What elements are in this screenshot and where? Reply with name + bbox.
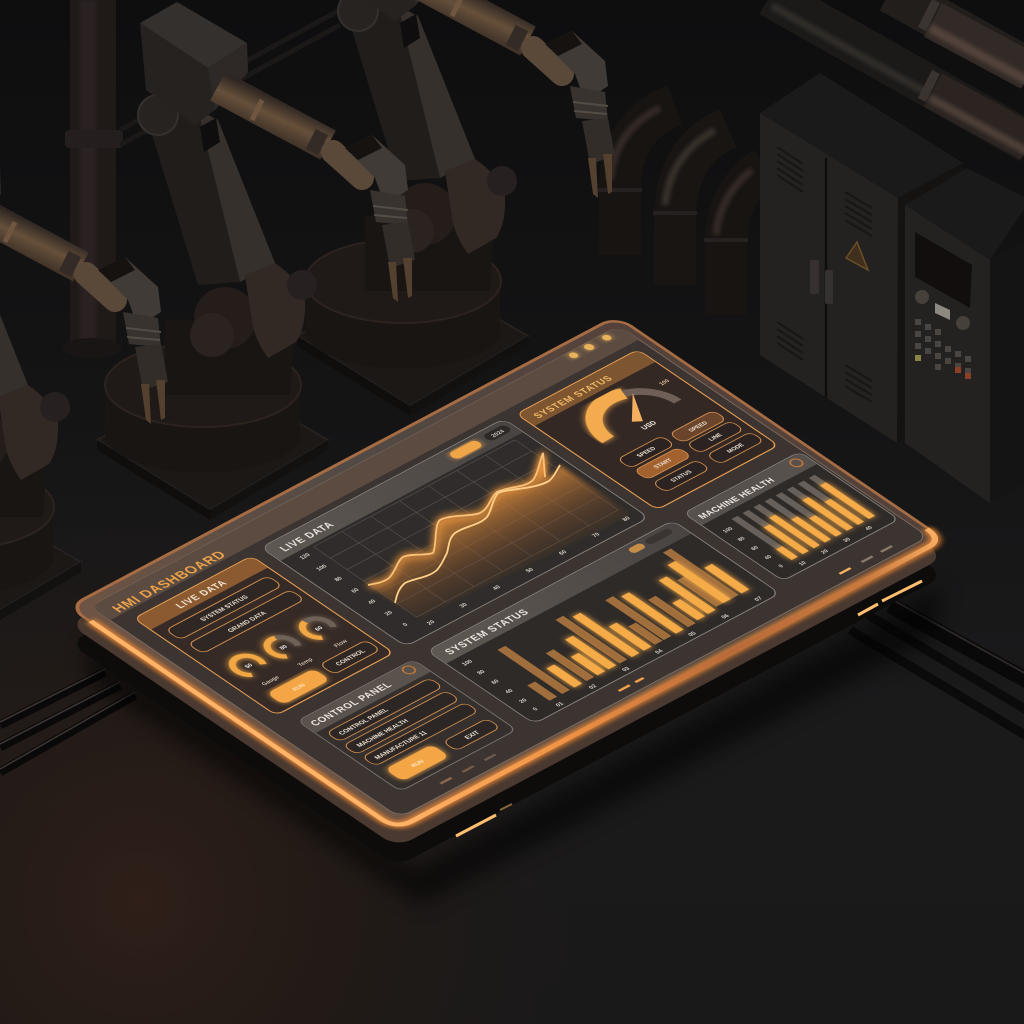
panel: status bar chart xyxy=(427,520,780,724)
gauge values xyxy=(239,624,350,687)
machine labels: 20 xyxy=(820,549,830,555)
gauge header xyxy=(518,350,655,426)
gauge values: 60 xyxy=(314,626,325,632)
control row labels: MACHINE HEALTH xyxy=(355,718,411,749)
tablet lip xyxy=(69,333,945,847)
y labels: 40 xyxy=(504,688,516,695)
screen xyxy=(915,232,972,308)
panel: gauge status: 100 xyxy=(658,378,672,387)
x axis labels: 50 xyxy=(525,567,536,574)
x labels: 05 xyxy=(687,631,699,638)
control button label: RUN xyxy=(410,759,426,769)
machine labels: 0 xyxy=(778,564,785,569)
gauge values: 80 xyxy=(279,644,290,651)
wall rails xyxy=(120,10,340,145)
floor cables left xyxy=(0,669,135,772)
machine bars gray xyxy=(731,475,875,560)
bars title: SYSTEM STATUS xyxy=(443,608,532,657)
chart toggles xyxy=(447,424,513,460)
robot arm: back xyxy=(297,0,615,416)
panel: line chart xyxy=(261,419,649,646)
line glow xyxy=(368,453,545,585)
panel: gauge status xyxy=(516,350,778,510)
orange button xyxy=(267,668,330,705)
x labels: 02 xyxy=(588,684,599,690)
bar toggles xyxy=(627,528,674,554)
pill labels: CONTROL xyxy=(334,649,368,667)
machine labels: 40 xyxy=(763,555,774,561)
machine bars orange xyxy=(743,482,875,560)
x axis labels: 40 xyxy=(492,585,503,591)
button label: RUN xyxy=(292,683,307,692)
status buttons xyxy=(617,407,764,493)
gauge title: SYSTEM STATUS xyxy=(531,374,616,420)
x axis labels: 20 xyxy=(426,620,437,626)
rim glow xyxy=(91,331,942,829)
robot arm: middle xyxy=(97,2,415,520)
y axis labels: 0 xyxy=(402,622,411,628)
y axis labels: 20 xyxy=(384,610,395,617)
x axis labels: 80 xyxy=(622,516,633,523)
button labels: START xyxy=(653,458,675,470)
chart header xyxy=(262,419,523,561)
line one xyxy=(368,453,545,585)
machine labels: 40 xyxy=(864,525,875,532)
y axis labels: 60 xyxy=(350,587,362,594)
line chart area xyxy=(368,453,630,618)
button labels: MODE xyxy=(726,443,746,454)
chart toggles: 2024 xyxy=(490,429,507,439)
gauge value: USD xyxy=(639,420,659,431)
y axis labels: 120 xyxy=(299,552,313,561)
y axis labels xyxy=(299,552,413,629)
button labels: SPEED xyxy=(688,421,710,433)
gauge values: Gauge xyxy=(261,675,282,687)
x axis labels xyxy=(426,516,633,626)
y axis labels: 80 xyxy=(334,576,345,583)
control row labels: MANUFACTURE 11 xyxy=(373,730,430,761)
machine labels: 60 xyxy=(750,545,760,552)
machine header xyxy=(685,452,817,525)
settings icon xyxy=(400,665,418,675)
floor cables right xyxy=(850,600,1024,738)
line two xyxy=(395,465,560,603)
panel header xyxy=(135,557,268,630)
tablet underside light strips xyxy=(456,581,922,836)
tablet glass surface xyxy=(69,316,945,830)
bars bright xyxy=(514,551,754,688)
y labels: 100 xyxy=(461,659,475,667)
top right pipes xyxy=(770,0,1024,153)
x axis labels: 70 xyxy=(591,532,602,539)
x axis labels: 30 xyxy=(459,602,470,609)
x labels: 03 xyxy=(621,666,633,673)
top header bar xyxy=(90,326,639,620)
power icon xyxy=(788,457,805,468)
machine title: MACHINE HEALTH xyxy=(696,476,777,521)
pill labels: GRAND DATA xyxy=(226,610,269,634)
machine labels: 10 xyxy=(798,561,808,567)
control button xyxy=(385,744,450,781)
button labels: LINE xyxy=(708,433,724,442)
machine labels: 80 xyxy=(737,536,747,543)
elbow pipes xyxy=(598,105,765,315)
y labels: 20 xyxy=(518,698,530,704)
glass slab xyxy=(69,316,945,830)
chart grid xyxy=(314,440,618,617)
window dots xyxy=(567,333,614,360)
button labels: SPEED xyxy=(636,446,658,459)
y labels: 80 xyxy=(476,669,488,676)
control header xyxy=(298,660,431,733)
donut gauges xyxy=(218,610,348,684)
bottom status strip xyxy=(440,545,892,785)
x labels: 06 xyxy=(721,613,732,620)
vertical wall pipe xyxy=(62,0,123,358)
panel title: LIVE DATA xyxy=(174,579,230,610)
pill labels xyxy=(199,583,368,688)
panel: control panel xyxy=(297,659,516,791)
gauge values: Flow xyxy=(333,639,350,649)
y labels: 0 xyxy=(532,707,541,712)
x labels: 07 xyxy=(754,596,764,603)
icon: warning triangle xyxy=(846,242,868,270)
keypad xyxy=(915,319,971,379)
title: HMI DASHBOARD xyxy=(109,548,230,615)
control row labels: EXIT xyxy=(463,730,482,741)
warm floor glow xyxy=(0,380,1024,1024)
x labels: 01 xyxy=(555,701,566,708)
gauge values: 50 xyxy=(244,663,255,670)
gauge values: Temp xyxy=(297,657,315,668)
chart title: LIVE DATA xyxy=(278,521,337,554)
y axis labels: 100 xyxy=(316,564,330,572)
bars tan xyxy=(477,549,743,701)
machine labels: 30 xyxy=(842,537,852,543)
pill labels: SYSTEM STATUS xyxy=(199,594,251,623)
inner bezel xyxy=(90,326,928,817)
x labels: 04 xyxy=(654,648,666,655)
tablet body xyxy=(69,352,945,866)
control row labels xyxy=(338,690,482,776)
control rows xyxy=(325,678,501,782)
panel: live data left xyxy=(134,556,394,715)
tablet shadow xyxy=(85,585,945,905)
button labels xyxy=(635,418,746,484)
control cabinet with keypad xyxy=(905,168,1024,503)
x labels xyxy=(555,596,764,708)
y axis labels: 40 xyxy=(367,599,378,606)
cabinet with warning sign xyxy=(760,73,963,443)
x axis labels: 60 xyxy=(558,549,569,556)
bright lower rim xyxy=(91,331,942,829)
y labels: 60 xyxy=(490,679,502,685)
panel: machine health xyxy=(684,452,899,581)
robot arm: left xyxy=(0,124,168,642)
button labels: STATUS xyxy=(670,470,694,483)
gauge arc xyxy=(575,379,679,440)
y labels xyxy=(461,659,543,714)
machine labels: 100 xyxy=(722,527,735,534)
gauge needle xyxy=(608,393,661,425)
control title: CONTROL PANEL xyxy=(308,681,395,728)
knobs xyxy=(915,290,970,330)
control row labels: CONTROL PANEL xyxy=(338,707,391,736)
machine labels xyxy=(722,484,875,575)
bars header xyxy=(428,521,691,663)
status pills xyxy=(166,575,380,705)
